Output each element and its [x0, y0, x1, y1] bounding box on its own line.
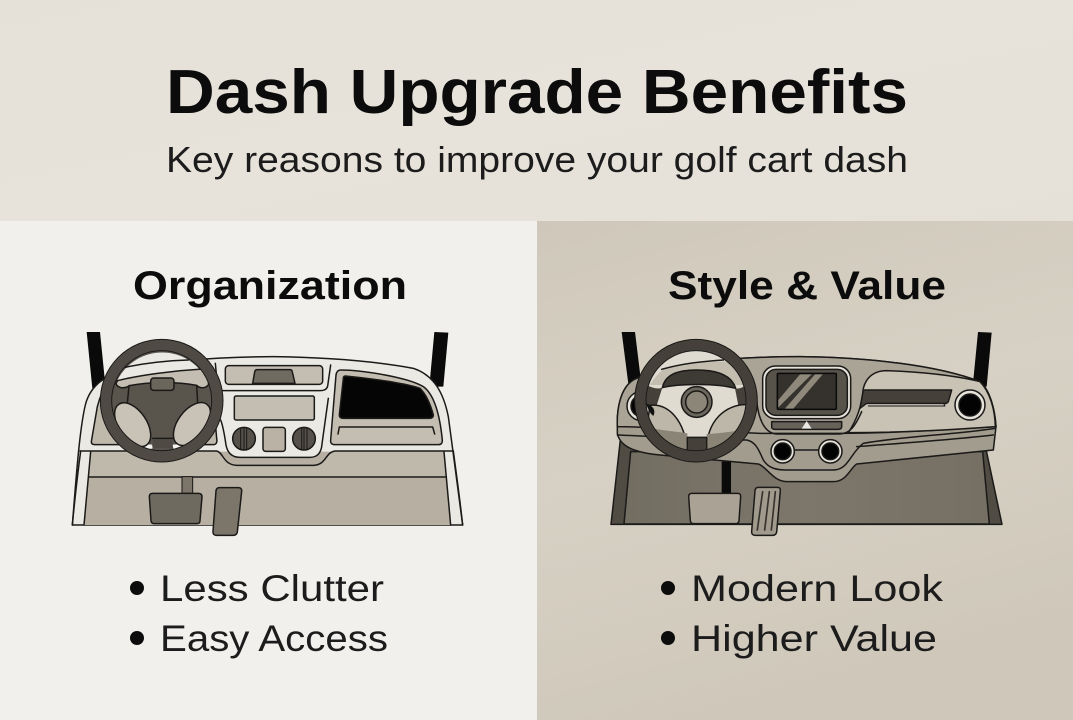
- icon: basic golf cart dash: [72, 332, 463, 535]
- panel: style and value: [537, 221, 1073, 720]
- subtitle: Key reasons to improve your golf cart dash: [166, 139, 908, 180]
- heading: organization: Organization: [133, 264, 407, 308]
- bullet list: style and value: Higher Value: [691, 618, 937, 659]
- bullet list: organization: [130, 568, 388, 659]
- panel: organization: [0, 221, 537, 720]
- bullet list: style and value: Modern Look: [691, 568, 944, 609]
- heading: style and value: Style & Value: [668, 264, 946, 308]
- title: Dash Upgrade Benefits: [166, 58, 908, 127]
- bullet list: organization: Easy Access: [160, 618, 388, 659]
- icon: upgraded golf cart dash: [611, 332, 1002, 535]
- icon: steering wheel: [640, 345, 752, 456]
- bullet list: style and value: [661, 568, 944, 659]
- bullet list: organization: Less Clutter: [160, 568, 384, 609]
- header panel: [0, 0, 1073, 221]
- icon: steering wheel: [106, 345, 218, 456]
